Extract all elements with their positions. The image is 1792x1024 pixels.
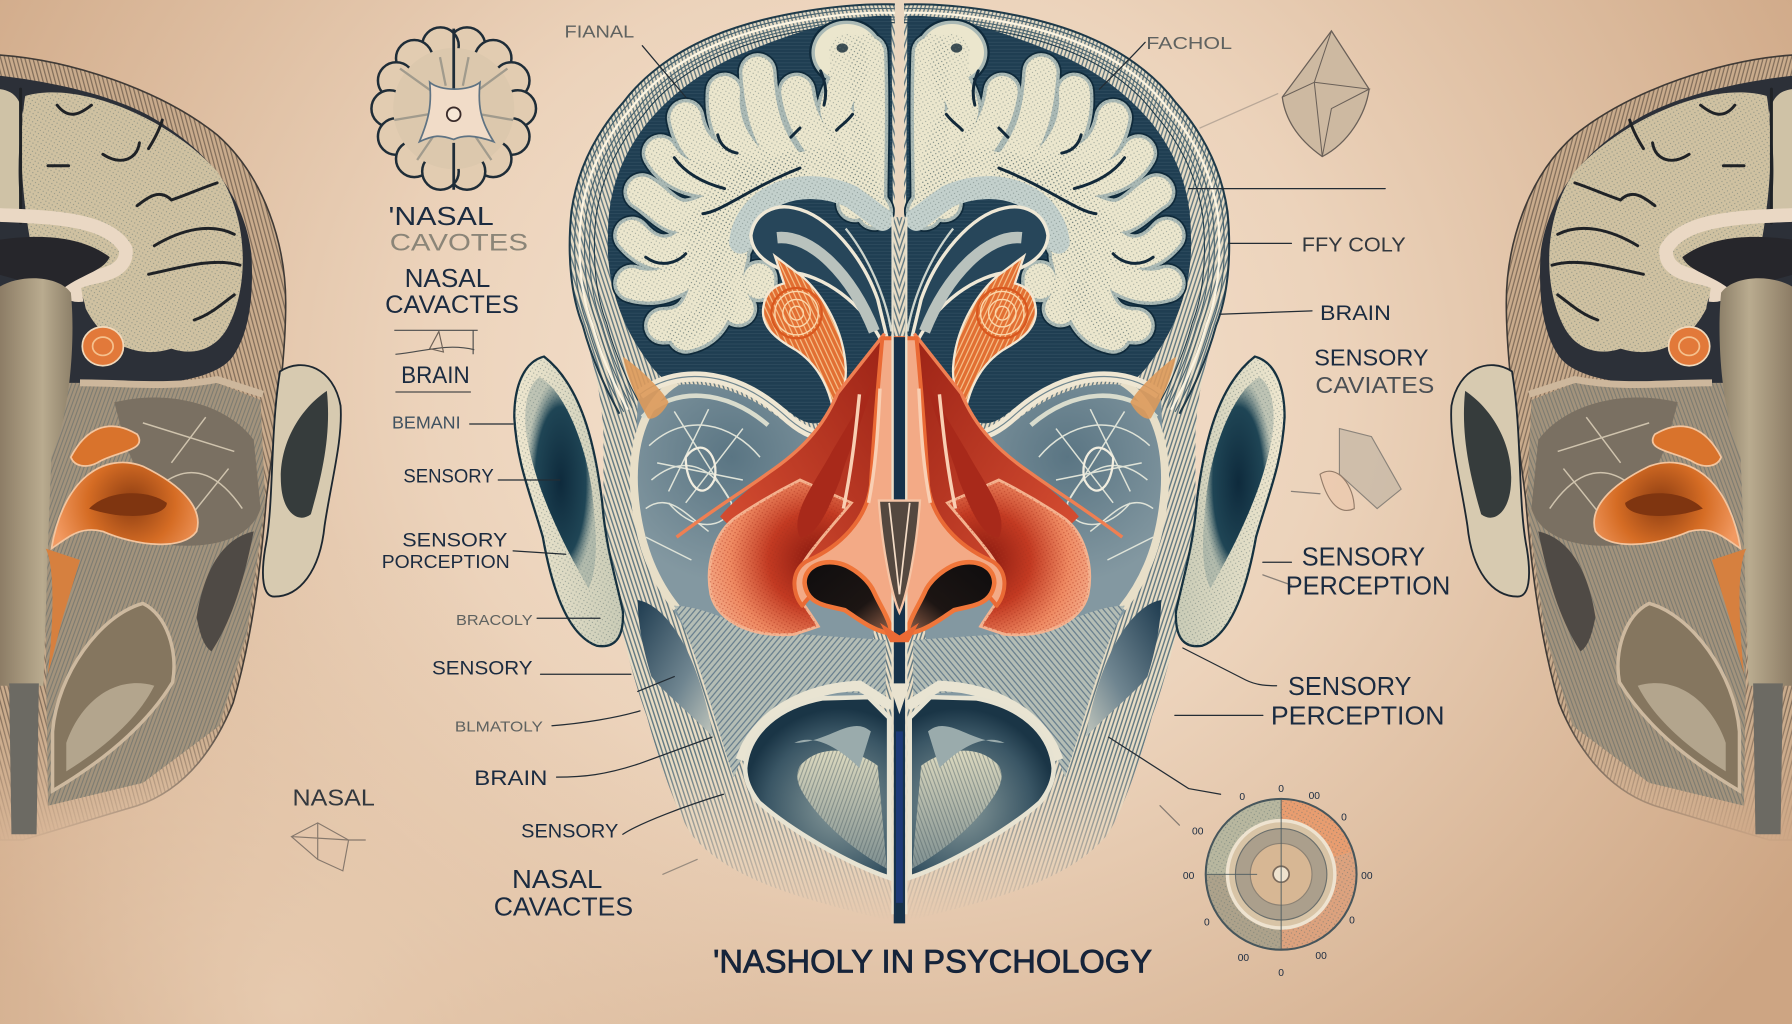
line two: PORCEPTION: [382, 551, 510, 572]
label: sensory: SENSORY: [403, 465, 494, 487]
icon: concentric disc diagram: 00: [1309, 791, 1320, 802]
icon: concentric disc diagram: 0: [1239, 792, 1245, 803]
label: top right: FACHOL: [1146, 33, 1232, 53]
line one: SENSORY: [1302, 542, 1425, 572]
label: bemani: BEMANI: [392, 413, 461, 433]
right side head illustration: [1451, 55, 1792, 840]
right ear: [1176, 357, 1285, 646]
label: bracoly: BRACOLY: [456, 613, 533, 629]
text block: sensory caviates: [1314, 345, 1434, 398]
icon: concentric disc diagram: [1183, 784, 1373, 979]
icon: concentric disc diagram: 00: [1361, 871, 1373, 882]
line two: PERCEPTION: [1271, 701, 1445, 731]
title: 'NASHOLY IN PSYCHOLOGY: [713, 944, 1152, 980]
label line two: CAVACTES: [385, 291, 519, 319]
icon: concentric disc diagram: 0: [1341, 813, 1347, 824]
icon: concentric disc diagram: 00: [1192, 826, 1204, 837]
icon: concentric disc diagram: 00: [1238, 953, 1249, 964]
line one: SENSORY: [1314, 345, 1429, 371]
text block: nasal cavactes: [385, 263, 519, 319]
icon: small brain cross-section: [371, 27, 536, 190]
right half of head: [899, 4, 1229, 923]
line two: CAVIATES: [1315, 372, 1434, 398]
icon: concentric disc diagram: 0: [1349, 915, 1355, 926]
leader lines: [470, 42, 1385, 874]
label: top left: FIANAL: [565, 22, 634, 42]
background lighter corner: [0, 549, 800, 1024]
midline septum: [879, 0, 920, 923]
label: brain right: BRAIN: [1320, 300, 1391, 325]
text block: sensory perception lower: [1271, 671, 1445, 731]
left side head illustration: [0, 55, 341, 840]
line two: PERCEPTION: [1286, 570, 1450, 600]
icon: concentric disc diagram: 00: [1183, 871, 1195, 882]
text block: nasal cavactes bottom: [494, 864, 633, 921]
label: sensory lower: SENSORY: [432, 657, 533, 679]
label: sensory bottom: SENSORY: [521, 821, 618, 843]
line one: SENSORY: [1288, 671, 1411, 701]
icon: polyhedral cone top right: [1200, 31, 1369, 157]
line one: SENSORY: [402, 529, 507, 551]
label: nasal bottom left: NASAL: [293, 785, 375, 811]
icon: concentric disc diagram: 0: [1204, 918, 1210, 929]
icon: concentric disc diagram: 0: [1278, 784, 1284, 795]
line one: NASAL: [512, 864, 602, 894]
text block: sensory perception upper: [1286, 542, 1450, 600]
label: ffy coly: FFY COLY: [1302, 233, 1406, 256]
brain label box: [394, 330, 478, 392]
label line one: NASAL: [405, 263, 490, 293]
icon: concentric disc diagram: 0: [1278, 968, 1284, 979]
label line two: CAVOTES: [390, 229, 528, 256]
left half of head: [570, 4, 899, 923]
label: blmatoly: BLMATOLY: [455, 719, 543, 735]
icon: small sketch middle right: [1320, 429, 1401, 510]
icon: concentric disc diagram: 00: [1315, 951, 1327, 962]
central head anatomy illustration: [514, 0, 1285, 923]
left ear: [514, 357, 623, 646]
icon: small geometric sketch bottom left: [291, 823, 366, 871]
line two: CAVACTES: [494, 891, 633, 921]
brain label box: BRAIN: [401, 362, 470, 389]
text block: sensory porception: [382, 529, 510, 572]
text block: nasal cavotes pale: [389, 201, 528, 256]
label: brain lower: BRAIN: [474, 765, 547, 790]
label line one: 'NASAL: [389, 201, 494, 231]
